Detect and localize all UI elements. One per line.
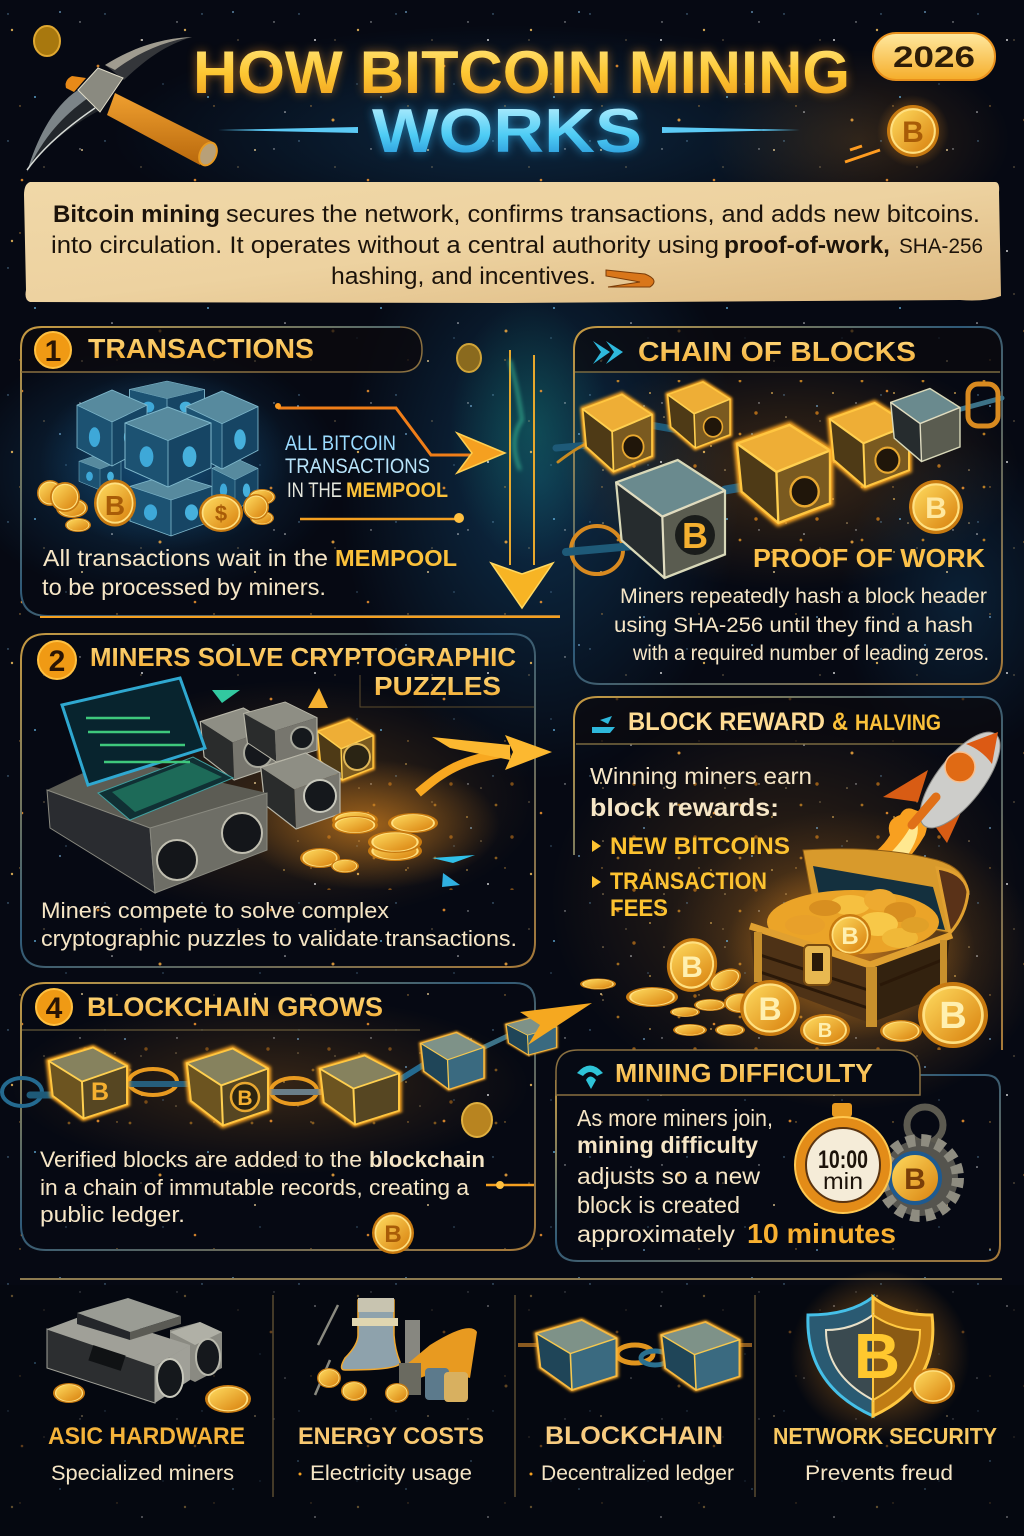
text: miners description: Miners compete to solve complex [41, 898, 389, 923]
title: WORKS [372, 97, 642, 166]
panel: 4 blockchain grows [2, 983, 592, 1254]
icon: pickaxe [27, 37, 220, 172]
icon: stopwatch and gear: min [823, 1168, 863, 1194]
icon: small coins and connector [372, 1103, 534, 1254]
text: mempool description: All transactions wait in the [43, 545, 328, 571]
icon: block chain: B [925, 492, 947, 525]
icon: block reward mark [592, 716, 615, 733]
panel: 1 transactions [21, 327, 560, 617]
icon: header coins [34, 26, 949, 167]
text: difficulty description: mining difficulty [577, 1132, 758, 1158]
title: HOW BITCOIN MINING [193, 39, 850, 106]
text: difficulty description [577, 1105, 896, 1249]
text: proof of work description [614, 585, 989, 665]
icon: header coins: B [902, 116, 924, 149]
icon: double chevron [593, 341, 623, 364]
intro parchment: secures the network, confirms transactions, and adds new bitcoins. [226, 201, 980, 228]
text: blockchain description: blockchain [369, 1147, 485, 1172]
text: blockchain description: public ledger. [40, 1202, 185, 1227]
label: all bitcoin transactions: TRANSACTIONS [285, 455, 430, 478]
number badge 1 [35, 332, 71, 368]
icon: signal mark [577, 1066, 603, 1089]
icon: shield: B [854, 1320, 900, 1392]
number badge 4: 4 [46, 992, 63, 1025]
text: difficulty description: adjusts so a new [577, 1163, 760, 1189]
panel: chain of blocks [556, 327, 1002, 684]
label: all bitcoin transactions [285, 432, 448, 502]
icon: stopwatch and gear [795, 1103, 958, 1216]
label: all bitcoin transactions: ALL BITCOIN [285, 432, 396, 455]
text: miners description [41, 898, 517, 951]
small coin [457, 344, 481, 372]
text: difficulty description: 10 minutes [747, 1218, 896, 1249]
text: mempool description: MEMPOOL [335, 545, 457, 571]
text: blockchain description: Verified blocks are added to the [40, 1147, 362, 1172]
icon: energy costs [315, 1298, 477, 1403]
icon: mempool cubes and coins [37, 370, 290, 550]
icon: coin pile: B [758, 991, 782, 1027]
icon: blockchain cubes [518, 1320, 752, 1390]
label: energy costs: ENERGY COSTS [298, 1423, 484, 1450]
icon: mempool cubes and coins: $ [215, 501, 227, 526]
intro parchment: hashing, and incentives. [331, 263, 596, 290]
icon: small coins and connector: B [384, 1221, 402, 1248]
list: reward types: TRANSACTION [610, 868, 767, 895]
text: winning miners: block rewards: [590, 794, 779, 822]
icon: coin pile [580, 932, 988, 1048]
text: mempool description: to be processed by miners. [42, 574, 326, 600]
intro parchment: Bitcoin mining [53, 201, 220, 228]
icon: coin pile: B [681, 951, 703, 984]
icon: shield [790, 1270, 970, 1440]
icon: growing chain: B [91, 1078, 109, 1106]
icon: asic hardware [47, 1298, 251, 1413]
heading: block reward and halving: & [832, 708, 848, 736]
card: asic hardware [47, 1298, 251, 1485]
icon: block chain [556, 382, 1002, 578]
intro parchment: SHA-256 [899, 235, 983, 258]
list: reward types: FEES [610, 895, 668, 922]
number badge 1: 1 [45, 335, 61, 368]
bottom divider [0, 1279, 1024, 1536]
icon: mempool cubes and coins: B [105, 490, 125, 521]
text: miners description: cryptographic puzzles to validate transactions. [41, 926, 517, 951]
panel: 2 miners solve puzzles [21, 634, 552, 967]
intro parchment: proof-of-work, [724, 232, 890, 259]
label: asic hardware: ASIC HARDWARE [48, 1423, 245, 1450]
text: difficulty description: block is created [577, 1192, 740, 1218]
decorative connector [300, 513, 464, 523]
text: proof of work description: with a required number of leading zeros. [632, 642, 989, 665]
title: HOW BITCOIN MINING [193, 39, 850, 106]
arrow: chain to reward [520, 1003, 592, 1045]
text: electricity usage: Electricity usage [310, 1461, 472, 1485]
heading: miners solve cryptographic puzzles: PUZZLES [374, 671, 501, 701]
icon: coin pile: B [939, 995, 967, 1037]
intro parchment [24, 182, 1001, 303]
label: blockchain: BLOCKCHAIN [545, 1422, 723, 1450]
icon: mining rig and laptop [47, 678, 500, 893]
text: proof of work description: Miners repeatedly hash a block header [620, 585, 987, 608]
year badge [873, 33, 995, 80]
number badge 2: 2 [49, 645, 65, 678]
intro parchment: into circulation. It operates without a central authority using [51, 232, 719, 259]
card: network security [773, 1270, 997, 1485]
card: blockchain [518, 1320, 752, 1485]
title [193, 39, 850, 166]
text: difficulty description: approximately [577, 1221, 736, 1247]
text: winning miners [590, 763, 812, 822]
text: specialized miners: Specialized miners [51, 1461, 234, 1485]
heading: chain of blocks: CHAIN OF BLOCKS [638, 336, 916, 367]
icon: coin pile: B [818, 1020, 832, 1042]
text: blockchain description: in a chain of immutable records, creating a [40, 1175, 470, 1200]
card: energy costs [298, 1298, 484, 1485]
label: all bitcoin transactions: MEMPOOL [346, 479, 448, 502]
heading: transactions: TRANSACTIONS [88, 333, 314, 364]
arrow: miners to reward [418, 735, 552, 793]
icon: treasure chest: B [841, 923, 859, 950]
number badge 4 [36, 989, 72, 1025]
year badge: 2026 [893, 41, 975, 74]
arrow: central down arrow [491, 350, 553, 608]
title: WORKS [372, 97, 642, 166]
connector arrow [275, 403, 505, 473]
text: mempool description [42, 545, 457, 600]
heading: block reward and halving [628, 708, 941, 736]
list: reward types: NEW BITCOINS [610, 833, 790, 860]
text: prevents freud: Prevents freud [805, 1461, 953, 1485]
text: winning miners: Winning miners earn [590, 763, 812, 789]
icon: stopwatch and gear: 10:00 [818, 1146, 868, 1174]
text: proof of work description: using SHA-256 until they find a hash [614, 614, 973, 637]
text: blockchain description [40, 1147, 485, 1227]
panel: mining difficulty [556, 1050, 1000, 1261]
icon: stopwatch and gear: B [904, 1163, 926, 1196]
icon: rocket [858, 720, 1014, 862]
heading: blockchain grows: BLOCKCHAIN GROWS [87, 992, 383, 1022]
text: difficulty description: As more miners join, [577, 1105, 773, 1131]
label: all bitcoin transactions: IN THE [287, 479, 342, 502]
icon: growing chain [2, 1017, 556, 1126]
heading: mining difficulty: MINING DIFFICULTY [615, 1058, 873, 1088]
heading: block reward and halving: BLOCK REWARD [628, 708, 825, 736]
list: reward types [592, 833, 790, 922]
icon: treasure chest [725, 849, 975, 1040]
panel: block reward and halving [574, 697, 1014, 1050]
icon: growing chain: B [237, 1087, 253, 1110]
heading: miners solve cryptographic puzzles: MINERS SOLVE CRYPTOGRAPHIC [90, 642, 516, 672]
icon: block chain: B [682, 515, 708, 556]
heading: block reward and halving: HALVING [855, 710, 941, 735]
label: network security: NETWORK SECURITY [773, 1423, 997, 1449]
text: decentralized ledger: Decentralized ledger [541, 1461, 734, 1485]
heading: proof of work: PROOF OF WORK [753, 543, 985, 573]
number badge 2 [38, 641, 76, 679]
heading: miners solve cryptographic puzzles [90, 642, 516, 701]
